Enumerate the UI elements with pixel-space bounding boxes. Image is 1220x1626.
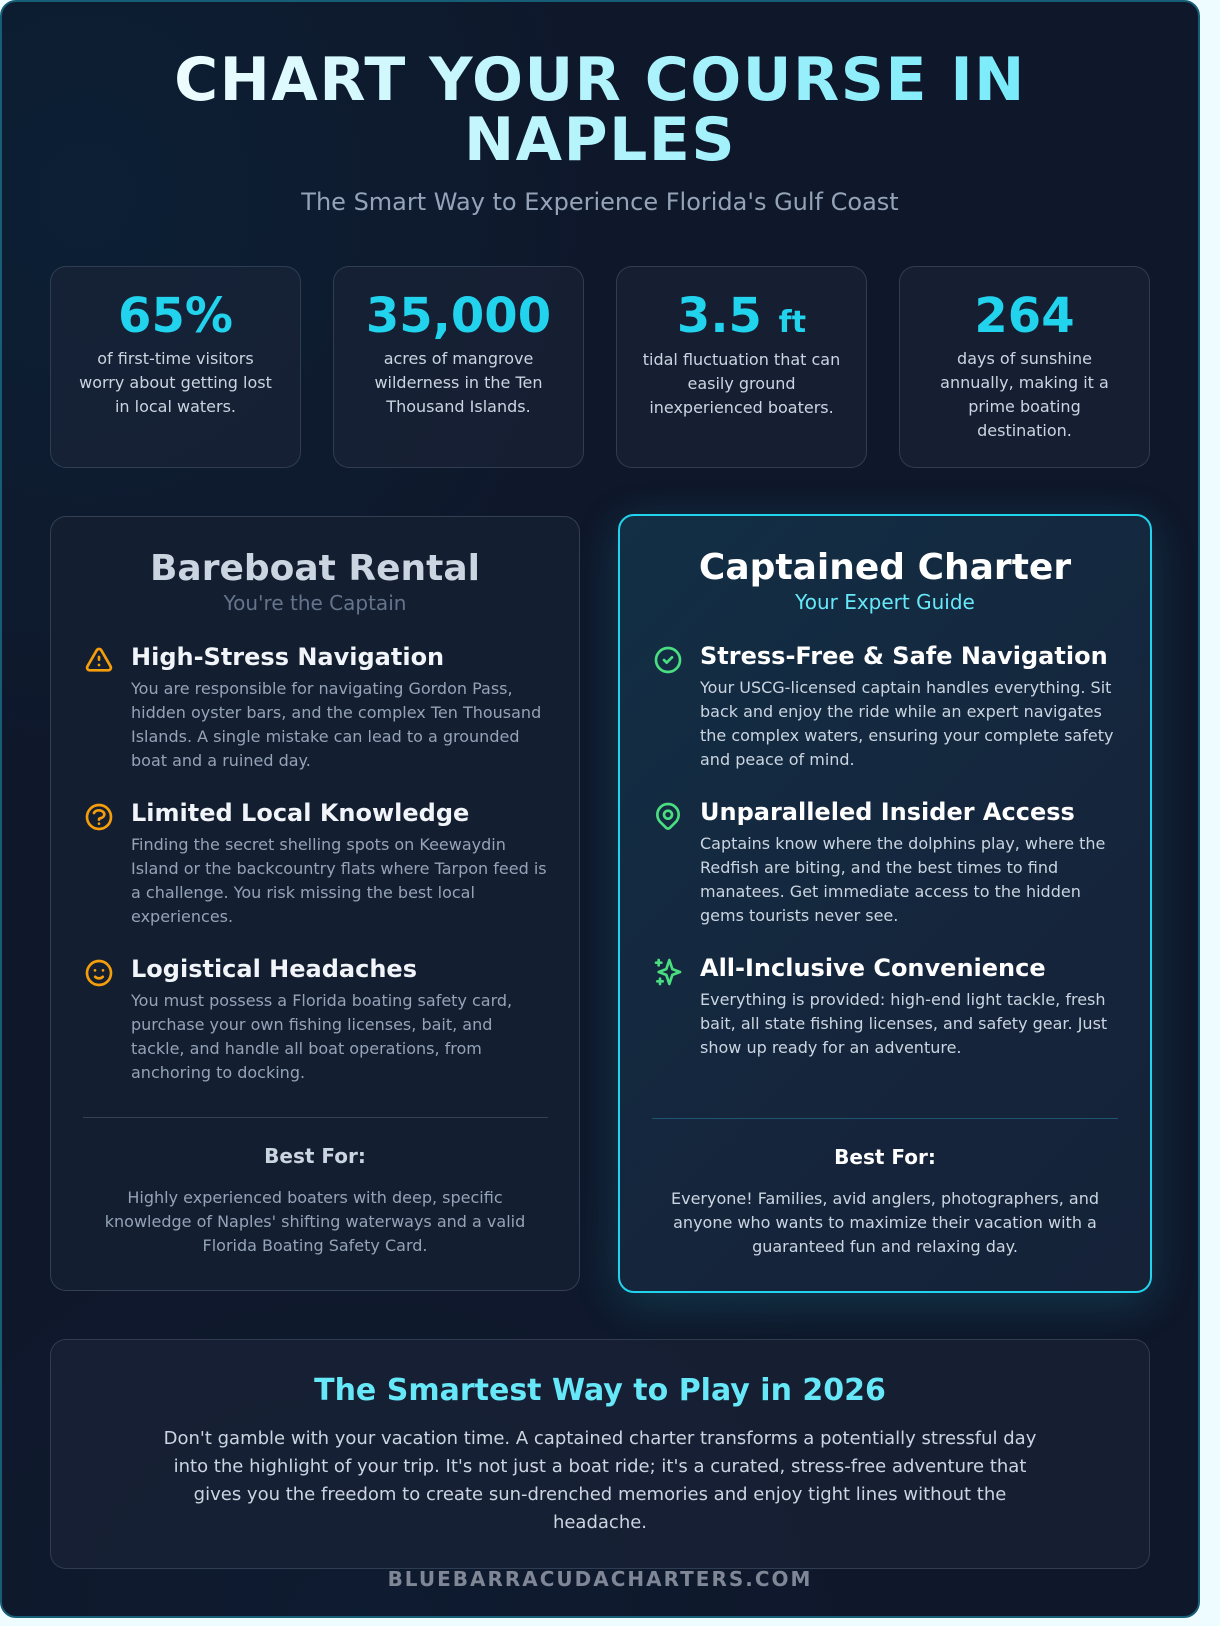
conclusion text [164,1428,1036,1533]
icon: smiley face [86,960,112,986]
item text: experiences. [131,907,233,926]
item heading: Unparalleled Insider Access [700,798,1075,826]
title [50,50,1150,170]
stat card: 264 [899,266,1150,468]
best for text: anyone who wants to maximize their vacation with a [673,1213,1097,1232]
item text [700,678,1113,769]
stat label: Thousand Islands. [386,397,531,416]
stat value: 3.5 ft [677,288,806,344]
tagline: Your Expert Guide [795,590,975,614]
conclusion text: Don't gamble with your vacation time. A captained charter transforms a potentially stressful day [164,1428,1036,1449]
tagline: You're the Captain [224,591,406,615]
stat label: annually, making it a [940,373,1109,392]
stat label: wilderness in the Ten [374,373,543,392]
item text: a challenge. You risk missing the best local [131,883,475,902]
best for text: guaranteed fun and relaxing day. [752,1237,1018,1256]
heading: Bareboat Rental [150,548,480,589]
item text: boat and a ruined day. [131,751,311,770]
item text: purchase your own fishing licenses, bait, and [131,1015,492,1034]
stat label [374,349,543,416]
item text: tackle, and handle all boat operations, from [131,1039,482,1058]
item text: Captains know where the dolphins play, where the [700,834,1105,853]
conclusion heading: The Smartest Way to Play in 2026 [314,1373,886,1408]
stat card: 3.5 ft [616,266,867,468]
icon: question mark [86,804,112,830]
item text: bait, all state fishing licenses, and safety gear. Just [700,1014,1107,1033]
item text [131,679,541,770]
item text: Your USCG-licensed captain handles everything. Sit [700,678,1111,697]
stat label [940,349,1109,440]
stat label: inexperienced boaters. [649,398,834,417]
panel: bareboat rental [50,516,580,1291]
best for text: Everyone! Families, avid anglers, photographers, and [671,1189,1099,1208]
item text: the complex waters, ensuring your complete safety [700,726,1113,745]
item: stress-free navigation [654,642,1113,769]
item text: anchoring to docking. [131,1063,305,1082]
stat label [79,349,272,416]
best for heading: Best For: [264,1144,366,1168]
item text [131,835,547,926]
item heading: Stress-Free & Safe Navigation [700,642,1108,670]
item text: You are responsible for navigating Gordon Pass, [131,679,513,698]
panel: conclusion [50,1339,1150,1569]
item text [700,990,1107,1057]
best for text [671,1189,1099,1256]
conclusion text: gives you the freedom to create sun-drenched memories and enjoy tight lines without the [194,1484,1006,1505]
item text: and peace of mind. [700,750,855,769]
item heading: High-Stress Navigation [131,643,444,671]
stat label: destination. [977,421,1072,440]
stat label: in local waters. [115,397,236,416]
footer: website: BLUEBARRACUDACHARTERS.COM [388,1567,812,1591]
title: CHART YOUR COURSE IN [174,45,1026,115]
item text: show up ready for an adventure. [700,1038,962,1057]
item text: You must possess a Florida boating safety card, [131,991,512,1010]
panel: captained charter [618,514,1152,1293]
item: all-inclusive convenience [654,954,1107,1057]
item heading: Limited Local Knowledge [131,799,469,827]
item text: Finding the secret shelling spots on Keewaydin [131,835,506,854]
item: limited local knowledge [86,799,547,926]
stat label: easily ground [687,374,796,393]
stat label: prime boating [968,397,1081,416]
item text: Island or the backcountry flats where Tarpon feed is [131,859,547,878]
item: high-stress navigation [86,643,541,770]
item text: Islands. A single mistake can lead to a grounded [131,727,519,746]
item: logistical headaches [86,955,512,1082]
icon: check circle [654,646,682,674]
best for text [105,1188,525,1255]
item text: Redfish are biting, and the best times to find [700,858,1058,877]
item text [131,991,512,1082]
stat label [643,350,840,417]
stat label: acres of mangrove [384,349,533,368]
item heading: All-Inclusive Convenience [700,954,1046,982]
stat label: of first-time visitors [97,349,254,368]
item text: manatees. Get immediate access to the hidden [700,882,1081,901]
stat label: tidal fluctuation that can [643,350,840,369]
best for text: Florida Boating Safety Card. [203,1236,427,1255]
stat value: 35,000 [366,288,551,344]
conclusion text: headache. [553,1512,647,1533]
stat label: worry about getting lost [79,373,272,392]
icon: location pin [656,802,680,830]
best for text: knowledge of Naples' shifting waterways and a valid [105,1212,525,1231]
item text: gems tourists never see. [700,906,898,925]
icon: warning triangle [86,648,112,672]
best for heading: Best For: [834,1145,936,1169]
item: insider access [656,798,1105,925]
item heading: Logistical Headaches [131,955,417,983]
heading: Captained Charter [699,547,1071,588]
stat value: 264 [974,288,1075,344]
title: NAPLES [464,105,736,175]
stat card: 65% [50,266,301,468]
best for text: Highly experienced boaters with deep, specific [127,1188,503,1207]
item text: hidden oyster bars, and the complex Ten Thousand [131,703,541,722]
item text: Everything is provided: high-end light tackle, fresh [700,990,1106,1009]
item text [700,834,1105,925]
conclusion text: into the highlight of your trip. It's not just a boat ride; it's a curated, stress-free adventure that [174,1456,1026,1477]
stat label: days of sunshine [957,349,1092,368]
subtitle: The Smart Way to Experience Florida's Gulf Coast [301,188,899,216]
stat card: 35,000 [333,266,584,468]
stat value: 65% [118,288,233,344]
icon: sparkles [654,958,682,986]
item text: back and enjoy the ride while an expert navigates [700,702,1102,721]
